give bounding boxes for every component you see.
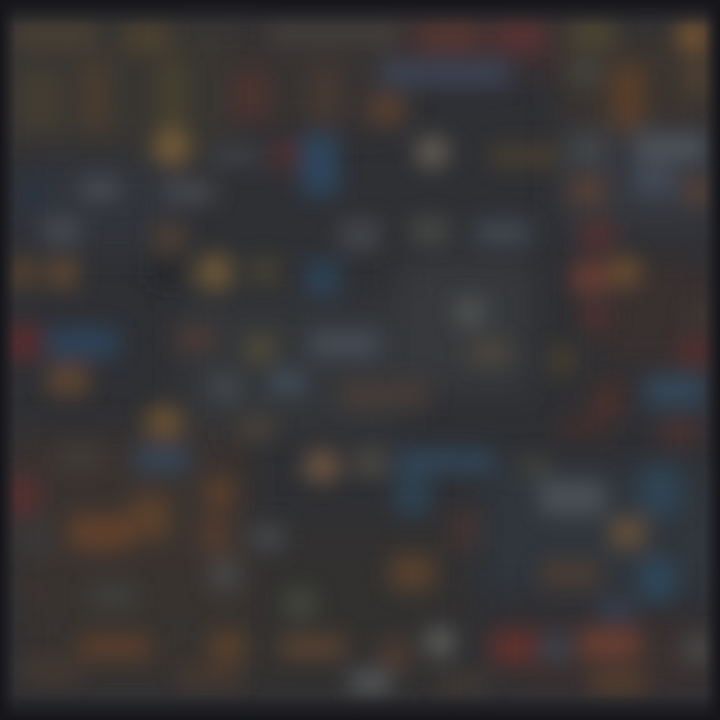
top row blotches [15,25,95,45]
lower middle blotches [144,405,184,439]
bottom row blotches [80,635,150,659]
upper middle blotches [152,130,192,166]
middle band blotches [8,258,38,288]
